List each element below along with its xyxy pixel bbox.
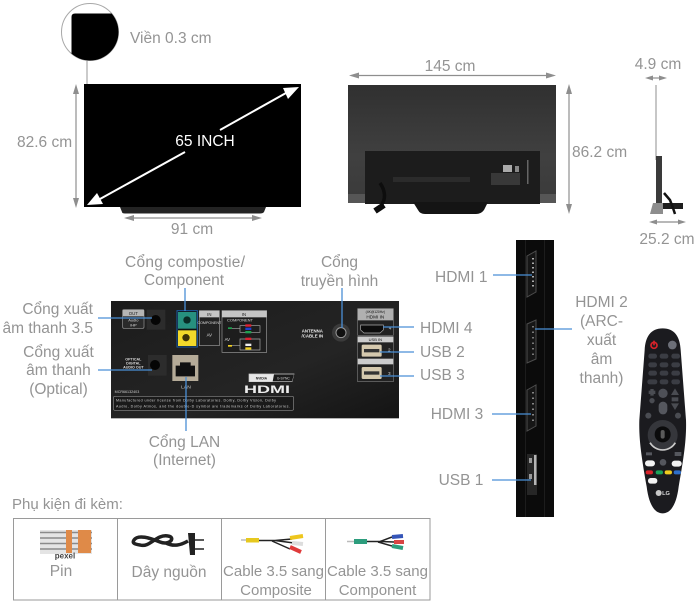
label: USB 1: USB 1	[439, 472, 483, 489]
callout lines	[98, 288, 414, 431]
HDMI logo: NVIDIA	[256, 376, 268, 380]
label: composite cable: Cable 3.5 sang	[223, 563, 324, 580]
remote body	[639, 328, 686, 513]
label: optical: (Optical)	[29, 381, 88, 398]
rear vent	[393, 177, 470, 182]
label: component cable: Component	[339, 582, 417, 599]
component diagram: AV	[225, 337, 230, 342]
label: HDMI 2: HDMI 2	[575, 294, 628, 311]
panel: side ports	[431, 240, 628, 517]
HDMI 3 port	[527, 385, 536, 431]
icon: batteries: pexel	[55, 552, 75, 560]
USB ports: USB IN	[369, 337, 382, 342]
rear bottom strip	[348, 194, 556, 203]
antenna port: ANTENNA	[302, 328, 324, 333]
TV stand	[120, 207, 266, 214]
model code: MCR66132403	[115, 390, 139, 394]
label: HDMI 3: HDMI 3	[431, 406, 483, 423]
colour buttons	[646, 470, 681, 474]
volume and channel keys	[649, 388, 679, 410]
audio out port: Audio	[128, 318, 139, 323]
label: audio 3.5: âm thanh 3.5	[3, 320, 93, 337]
scroll wheel	[648, 420, 678, 450]
HDMI 4 port	[358, 309, 393, 335]
component diagram: IN	[242, 312, 246, 317]
label: composite cable: Composite	[240, 582, 312, 599]
callout lines	[492, 275, 572, 480]
component diagram: COMPONENT	[227, 318, 254, 323]
rear width label: 145 cm	[425, 58, 475, 75]
LAN port: LAN	[181, 384, 191, 390]
panel: rear ports	[3, 254, 473, 469]
composite label: AV	[207, 332, 212, 337]
audio out port: OUT	[129, 311, 138, 316]
label: antenna: Cổng	[321, 254, 358, 271]
rear stand	[413, 202, 488, 214]
HDMI logo	[244, 374, 294, 396]
antenna port	[302, 324, 350, 342]
label: HDMI 1: HDMI 1	[435, 269, 488, 286]
icon: composite cable	[241, 536, 303, 552]
icon: component cable	[347, 536, 404, 548]
rear body	[348, 85, 556, 203]
icon: bezel magnifier	[62, 4, 120, 84]
optical port	[123, 355, 167, 376]
accessories table	[14, 518, 430, 600]
composite label	[197, 311, 222, 346]
USB ports: 2	[388, 348, 391, 353]
mic-top button	[668, 341, 677, 349]
side port strip	[516, 240, 554, 517]
label: HDMI 4: HDMI 4	[420, 320, 473, 337]
HDMI 1 port	[527, 251, 536, 297]
cable and stand foot	[663, 193, 683, 214]
thin panel	[655, 85, 657, 160]
audio out port	[123, 310, 165, 330]
composite jacks	[177, 311, 197, 347]
small keys	[646, 452, 681, 466]
diagonal arrow	[87, 87, 299, 205]
app buttons	[645, 460, 682, 484]
base	[650, 203, 663, 214]
optical port: AUDIO OUT	[123, 365, 144, 369]
component diagram	[222, 311, 267, 352]
rear height label: 86.2 cm	[572, 144, 627, 161]
label: HDMI 2: (ARC-	[580, 313, 623, 330]
foot width arrow	[649, 220, 686, 224]
centre keys	[658, 389, 668, 398]
label: antenna: truyền hình	[301, 273, 378, 290]
audio out port: /HP	[130, 322, 137, 327]
composite label: COMPONENT	[197, 321, 222, 325]
panel: rear view of TV	[348, 58, 627, 214]
rear width arrow	[349, 72, 556, 78]
power button	[651, 341, 657, 348]
LAN port	[172, 355, 198, 390]
HDMI 4 port: 4	[389, 326, 392, 331]
optical port: DIGITAL	[126, 361, 141, 365]
rear port cluster	[491, 160, 528, 185]
number keys	[647, 354, 680, 384]
depth arrow	[645, 76, 667, 80]
licence box	[113, 396, 294, 410]
label: HDMI 2: âm	[591, 351, 612, 368]
USB 1 port	[527, 454, 537, 495]
USB ports: 3	[388, 371, 391, 376]
label: HDMI 2: xuất	[587, 332, 617, 349]
depth label: 4.9 cm	[635, 56, 681, 73]
height arrow	[73, 84, 79, 208]
TV screen	[84, 84, 301, 207]
USB ports	[358, 337, 393, 382]
label: HDMI 2: thanh)	[580, 370, 623, 387]
stand width arrow	[124, 215, 262, 221]
HDMI 4 port: (4K@120Hz)	[366, 310, 385, 314]
power cord	[375, 183, 384, 211]
rear height arrow	[566, 84, 572, 214]
accessories heading: Phụ kiện đi kèm:	[12, 496, 123, 513]
licence box: Manufactured under license from Dolby Laboratories. Dolby, Dolby Vision, Dolby	[116, 399, 276, 403]
panel: accessories	[12, 496, 430, 600]
icon: power cord	[133, 533, 204, 555]
HDMI 2 port	[527, 320, 536, 363]
body	[656, 156, 662, 206]
stand width label: 91 cm	[171, 221, 213, 238]
optical port: OPTICAL	[125, 358, 142, 362]
icon: remote control	[639, 328, 686, 513]
label: composite/component: Component	[144, 272, 225, 289]
label: USB 3: USB 3	[420, 367, 465, 384]
foot label: 25.2 cm	[639, 231, 695, 248]
composite label: IN	[207, 312, 212, 317]
height label: 82.6 cm	[17, 134, 72, 151]
label: component cable: Cable 3.5 sang	[327, 563, 428, 580]
port plate	[111, 301, 399, 418]
panel: front view of TV	[17, 4, 301, 238]
HDMI logo: G-SYNC	[277, 376, 290, 380]
label: USB 2: USB 2	[420, 344, 465, 361]
antenna port: /CABLE IN	[302, 333, 323, 338]
label: batteries: Pin	[50, 563, 72, 580]
label: optical: Cổng xuất	[23, 344, 95, 361]
label: composite/component: Cổng compostie/	[125, 254, 246, 271]
bezel label: Viền 0.3 cm	[130, 30, 212, 47]
HDMI 4 port: HDMI IN	[366, 314, 384, 319]
rear inner cover	[365, 151, 540, 204]
label: optical: âm thanh	[26, 362, 91, 379]
label: LAN: Cổng LAN	[149, 434, 220, 451]
screen size label: 65 INCH	[175, 133, 235, 150]
icon: batteries	[40, 530, 92, 560]
label: audio 3.5: Cổng xuất	[22, 301, 94, 318]
licence box: Audio, Dolby Atmos, and the double-D symbol are trademarks of Dolby Laboratories.	[116, 405, 290, 409]
LG logo: LG	[662, 491, 671, 497]
label: power cord: Dây nguồn	[132, 564, 206, 581]
LG logo	[656, 490, 671, 497]
HDMI logo: HDMI	[244, 384, 290, 396]
label: LAN: (Internet)	[153, 452, 216, 469]
panel: side view of TV	[635, 56, 695, 248]
